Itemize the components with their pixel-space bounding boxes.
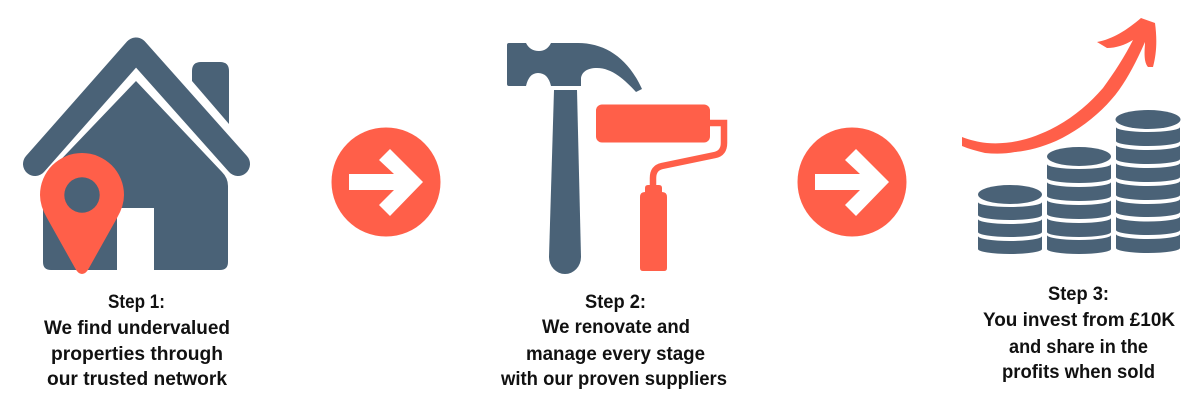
panel: step 2 — [500, 43, 727, 390]
hammer handle — [549, 90, 581, 274]
step 3 caption: Step 3: — [1048, 284, 1109, 305]
step 2 caption: with our proven suppliers — [500, 369, 727, 390]
hammer head — [507, 43, 642, 92]
left coin stack — [978, 185, 1042, 254]
pin hole — [64, 177, 100, 213]
panel: step 3 — [962, 18, 1180, 383]
step 1 caption — [44, 292, 230, 390]
icon: coin stacks — [978, 110, 1180, 254]
step 3 caption: You invest from £10K — [983, 310, 1175, 331]
roller drum — [596, 104, 710, 142]
step 2 caption: manage every stage — [526, 344, 705, 365]
middle coin stack — [1047, 147, 1111, 254]
right coin stack — [1116, 110, 1180, 253]
step 1 caption: We find undervalued — [44, 318, 230, 339]
step 1 caption: properties through — [51, 344, 223, 365]
location pin — [40, 153, 124, 274]
step 1 caption: our trusted network — [47, 369, 227, 390]
house roof — [35, 50, 238, 164]
step 2 caption — [500, 292, 727, 390]
step 2 caption: Step 2: — [585, 292, 646, 313]
roller frame — [653, 123, 724, 188]
arrow: step 1 to step 2 — [332, 128, 440, 236]
step 1 caption: Step 1: — [108, 292, 165, 313]
step 3 caption: profits when sold — [1002, 362, 1155, 383]
icon: hammer and paint roller — [507, 43, 724, 274]
roller grip — [640, 185, 667, 271]
step 2 caption: We renovate and — [542, 317, 690, 338]
panel: step 1 — [35, 50, 238, 390]
icon: house with location pin — [35, 50, 238, 274]
house body — [43, 81, 228, 270]
step 3 caption: and share in the — [1009, 337, 1148, 358]
house chimney — [192, 62, 229, 124]
arrow: step 2 to step 3 — [798, 128, 906, 236]
icon: rising growth arrow — [962, 18, 1156, 154]
step 3 caption — [983, 284, 1175, 383]
